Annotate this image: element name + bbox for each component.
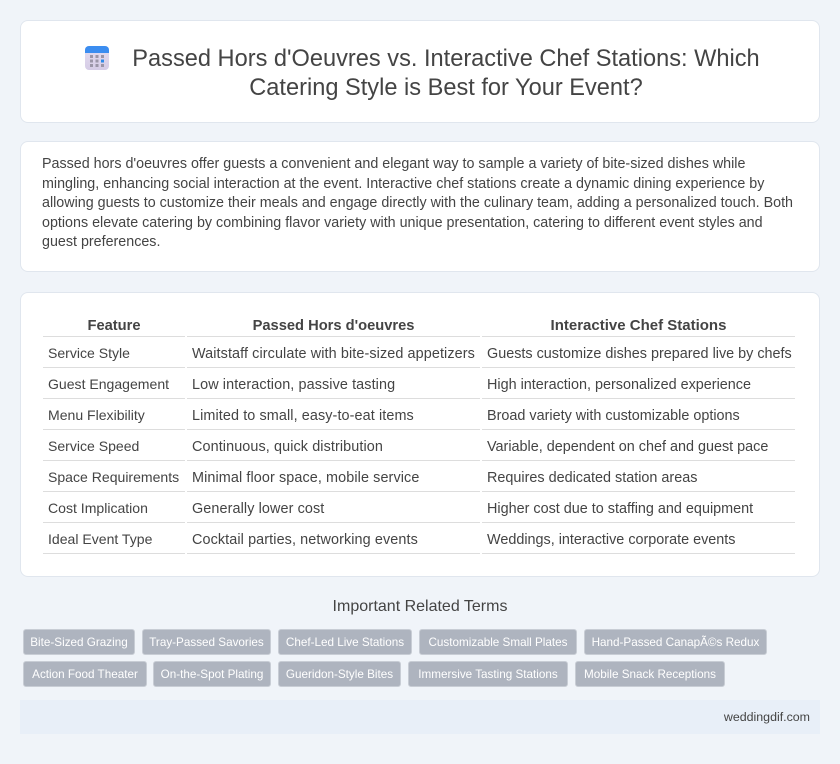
- row: space requirements: [43, 469, 795, 492]
- row: guest engagement: [43, 376, 795, 399]
- icon: calendar: [85, 46, 109, 70]
- panel: introduction text: [20, 141, 820, 272]
- row: cost implication: Cost Implication: [48, 500, 148, 516]
- row: menu flexibility: [43, 407, 795, 430]
- row: service speed: Service Speed: [48, 438, 139, 454]
- table header: [43, 317, 795, 337]
- row: service style: Service Style: [48, 345, 130, 361]
- panel: title header: [20, 20, 820, 123]
- title: Passed Hors d'Oeuvres vs. Interactive Chef Stations: Which: [132, 46, 760, 72]
- footer source text: weddingdif.com: [724, 710, 810, 724]
- related term tags: Hand-Passed CanapÃ©s Redux: [592, 636, 759, 649]
- related term tags: Mobile Snack Receptions: [584, 668, 716, 681]
- row: cost implication: Generally lower cost: [192, 501, 324, 517]
- row: menu flexibility: Menu Flexibility: [48, 407, 145, 423]
- related term tags: Bite-Sized Grazing: [30, 636, 128, 649]
- related term tags: Immersive Tasting Stations: [418, 668, 558, 681]
- row: ideal event type: Cocktail parties, networking events: [192, 532, 418, 548]
- row: service speed: Continuous, quick distribution: [192, 439, 383, 455]
- row: service style: Waitstaff circulate with bite-sized appetizers: [192, 346, 475, 362]
- comparison table: [43, 317, 795, 554]
- intro paragraph: allowing guests to customize their meals and engage directly with the culinary team, adding a personalized touch. Both: [42, 195, 793, 211]
- row: space requirements: Requires dedicated station areas: [487, 470, 697, 486]
- related term tags: Action Food Theater: [32, 668, 138, 681]
- table header: Interactive Chef Stations: [551, 317, 726, 334]
- intro paragraph: options elevate catering by combining flavor variety with unique presentation, catering to different event styles and: [42, 214, 763, 230]
- row: service style: Guests customize dishes prepared live by chefs: [487, 346, 792, 362]
- footer bar: [20, 700, 820, 734]
- row: ideal event type: [43, 531, 795, 554]
- heading: important related terms: Important Related Terms: [333, 598, 507, 615]
- row: cost implication: [43, 500, 795, 523]
- row: service speed: Variable, dependent on chef and guest pace: [487, 439, 768, 455]
- row: service style: [43, 345, 795, 368]
- row: guest engagement: High interaction, personalized experience: [487, 377, 751, 393]
- row: menu flexibility: Broad variety with customizable options: [487, 408, 740, 424]
- related term tags: [23, 629, 767, 687]
- row: space requirements: Space Requirements: [48, 469, 179, 485]
- related term tags: Gueridon-Style Bites: [286, 668, 393, 681]
- intro paragraph: [42, 156, 793, 250]
- row: guest engagement: Guest Engagement: [48, 376, 169, 392]
- row: ideal event type: Weddings, interactive corporate events: [487, 532, 736, 548]
- row: guest engagement: Low interaction, passive tasting: [192, 377, 395, 393]
- table header: Feature: [87, 318, 141, 334]
- title: Catering Style is Best for Your Event?: [249, 75, 643, 101]
- related term tags: Customizable Small Plates: [428, 636, 568, 649]
- intro paragraph: guest preferences.: [42, 234, 160, 250]
- title: [132, 46, 760, 101]
- related term tags: Chef-Led Live Stations: [286, 636, 404, 649]
- related term tags: Tray-Passed Savories: [149, 636, 264, 649]
- row: menu flexibility: Limited to small, easy-to-eat items: [192, 408, 414, 424]
- panel: comparison table card: [20, 292, 820, 577]
- row: cost implication: Higher cost due to staffing and equipment: [487, 501, 753, 517]
- intro paragraph: Passed hors d'oeuvres offer guests a convenient and elegant way to sample a variety of bite-sized dishes while: [42, 156, 745, 172]
- row: ideal event type: Ideal Event Type: [48, 531, 152, 547]
- row: space requirements: Minimal floor space, mobile service: [192, 470, 419, 486]
- row: service speed: [43, 438, 795, 461]
- related term tags: On-the-Spot Plating: [161, 668, 263, 681]
- intro paragraph: mingling, enhancing social interaction at the event. Interactive chef stations create a dynamic dining experience by: [42, 176, 764, 192]
- table header: Passed Hors d'oeuvres: [253, 318, 414, 334]
